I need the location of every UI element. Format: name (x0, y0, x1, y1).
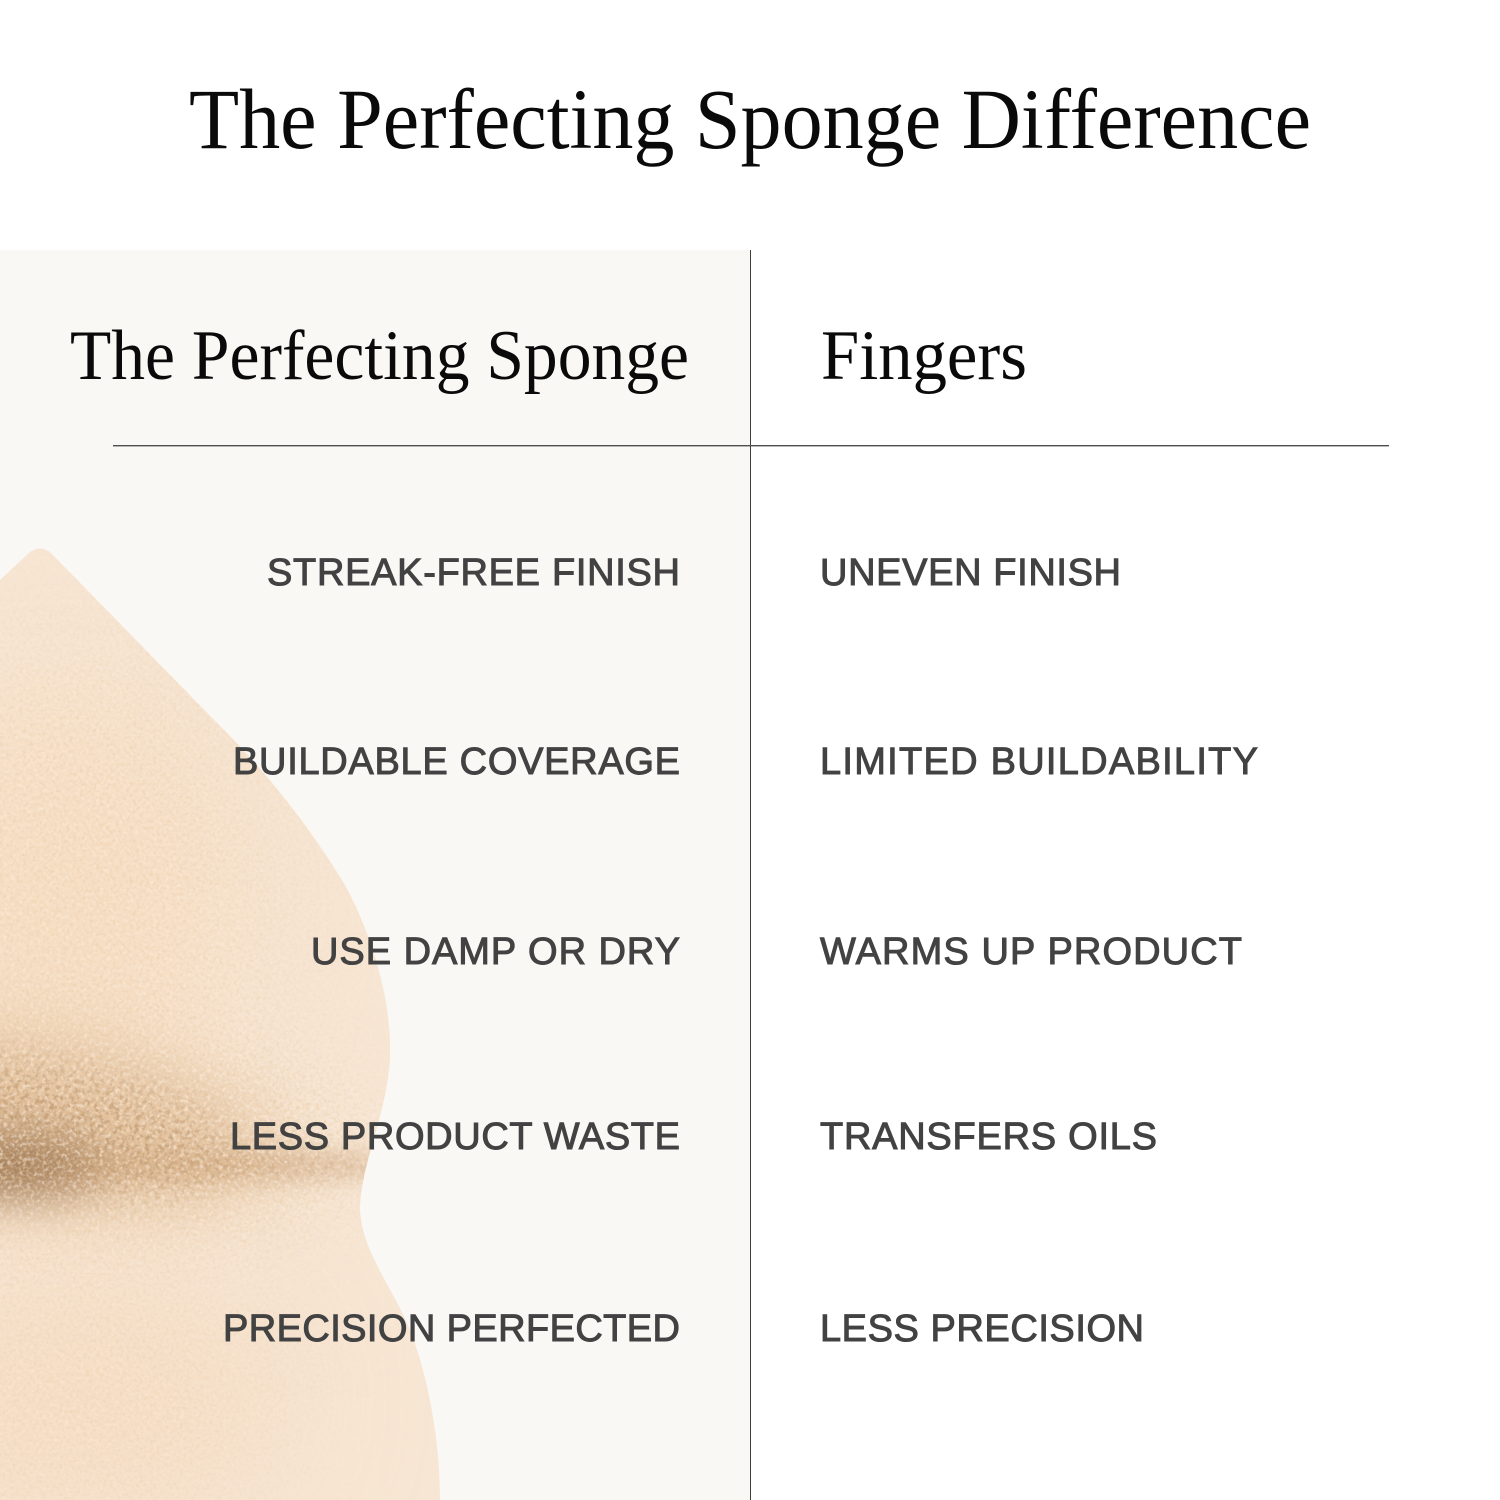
sponge benefits list (223, 552, 680, 1350)
label: less product waste: LESS PRODUCT WASTE (230, 1116, 680, 1158)
label: use damp or dry: USE DAMP OR DRY (311, 931, 680, 973)
heading: fingers: Fingers (821, 317, 1027, 395)
column divider (750, 250, 751, 1500)
fingers drawbacks list (820, 552, 1258, 1350)
heading: the perfecting sponge: The Perfecting Sponge (70, 317, 689, 395)
label: transfers oils: TRANSFERS OILS (820, 1116, 1157, 1158)
panel: the perfecting sponge column (0, 250, 750, 1500)
label: warms up product: WARMS UP PRODUCT (820, 931, 1242, 973)
label: less precision: LESS PRECISION (820, 1308, 1144, 1350)
label: precision perfected: PRECISION PERFECTED (223, 1308, 680, 1350)
header rule (113, 445, 1389, 446)
image: sponge close-up (0, 520, 460, 1500)
title: The Perfecting Sponge Difference (189, 71, 1311, 167)
label: streak-free finish: STREAK-FREE FINISH (267, 552, 680, 594)
label: buildable coverage: BUILDABLE COVERAGE (233, 741, 680, 783)
label: limited buildability: LIMITED BUILDABILITY (820, 741, 1258, 783)
label: uneven finish: UNEVEN FINISH (820, 552, 1121, 594)
